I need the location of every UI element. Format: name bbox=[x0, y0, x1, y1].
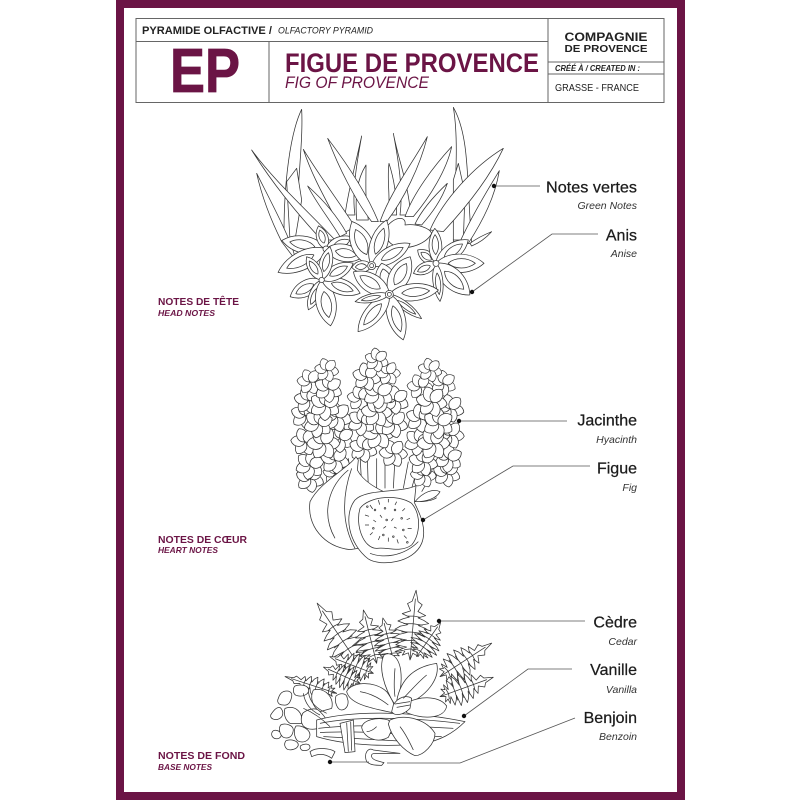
label: anise bbox=[606, 228, 637, 260]
section: heart notes bbox=[158, 534, 247, 555]
hyacinth stems bbox=[348, 455, 433, 492]
rose petals behind stars bbox=[385, 218, 432, 248]
section: head notes: HEAD NOTES bbox=[158, 308, 215, 318]
whole fig bbox=[310, 457, 390, 550]
fig seeds bbox=[365, 499, 412, 543]
page frame bbox=[120, 4, 681, 796]
star anise 4 bbox=[349, 252, 439, 342]
header: product name: FIG OF PROVENCE bbox=[285, 74, 430, 92]
header: pyramid title: OLFACTORY PYRAMID bbox=[278, 26, 373, 36]
hyacinth spike right bbox=[398, 355, 469, 492]
star anise 5 bbox=[411, 228, 484, 302]
leader: cedar bbox=[437, 619, 585, 623]
label: vanilla bbox=[590, 662, 637, 696]
label: green notes: Green Notes bbox=[577, 200, 638, 212]
label: cedar: Cèdre bbox=[593, 614, 637, 632]
section: base notes: NOTES DE FOND bbox=[158, 750, 245, 762]
label: fig: Fig bbox=[622, 482, 637, 494]
label: green notes: Notes vertes bbox=[546, 180, 637, 196]
label: vanilla: Vanille bbox=[590, 662, 637, 679]
label: benzoin: Benzoin bbox=[599, 731, 637, 743]
section: heart notes: HEART NOTES bbox=[158, 545, 218, 555]
header: company: DE PROVENCE bbox=[564, 43, 648, 55]
star anise 1 bbox=[274, 224, 365, 281]
section: head notes bbox=[158, 295, 239, 318]
header: product name bbox=[285, 48, 539, 92]
label: cedar bbox=[593, 614, 637, 648]
illustration: green notes and anise bbox=[252, 107, 503, 342]
leader: green notes bbox=[492, 184, 540, 188]
header: company bbox=[564, 32, 648, 55]
fig bracts bbox=[415, 490, 440, 502]
leader: anise bbox=[470, 234, 598, 294]
header: company: COMPAGNIE bbox=[564, 32, 648, 44]
hyacinth spike centre bbox=[341, 344, 414, 470]
star anise 2 bbox=[286, 245, 363, 328]
vanilla pods bbox=[303, 692, 465, 765]
cedar fronds bbox=[282, 589, 500, 711]
label: fig bbox=[597, 460, 637, 494]
label: benzoin bbox=[584, 710, 637, 743]
label: hyacinth: Jacinthe bbox=[577, 412, 637, 430]
header: created in: CRÉÉ À / CREATED IN : bbox=[555, 64, 640, 73]
section: head notes: NOTES DE TÊTE bbox=[158, 295, 239, 308]
illustration: hyacinth and fig bbox=[286, 344, 469, 563]
leader: fig bbox=[421, 466, 590, 522]
header: EP code: EP bbox=[170, 37, 240, 106]
section: heart notes: NOTES DE CŒUR bbox=[158, 534, 247, 546]
leader: benzoin bbox=[328, 718, 575, 764]
illustration: cedar, vanilla and benzoin bbox=[271, 589, 500, 765]
label: cedar: Cedar bbox=[608, 636, 637, 648]
leader: hyacinth bbox=[457, 419, 567, 423]
header: location: GRASSE - FRANCE bbox=[555, 83, 639, 94]
hyacinth spike left bbox=[286, 355, 360, 497]
header: pyramid title bbox=[142, 25, 373, 37]
star anise 3 bbox=[342, 217, 414, 273]
section: base notes: BASE NOTES bbox=[158, 762, 212, 772]
label: benzoin: Benjoin bbox=[584, 710, 637, 727]
leader: vanilla bbox=[462, 669, 572, 718]
label: fig: Figue bbox=[597, 460, 637, 478]
label: hyacinth: Hyacinth bbox=[596, 434, 637, 446]
label: hyacinth bbox=[577, 412, 637, 446]
label: anise: Anis bbox=[606, 228, 637, 244]
benzoin chunks bbox=[271, 685, 348, 758]
header: pyramid title: PYRAMIDE OLFACTIVE / bbox=[142, 25, 272, 37]
label: vanilla: Vanilla bbox=[606, 684, 637, 696]
cut fig bbox=[349, 486, 424, 563]
section: base notes bbox=[158, 750, 245, 772]
label: green notes bbox=[546, 180, 638, 212]
label: anise: Anise bbox=[610, 248, 637, 260]
vanilla flower bbox=[347, 654, 447, 756]
back leaves bbox=[252, 107, 503, 259]
header: product name: FIGUE DE PROVENCE bbox=[285, 48, 539, 78]
header table bbox=[136, 18, 664, 106]
